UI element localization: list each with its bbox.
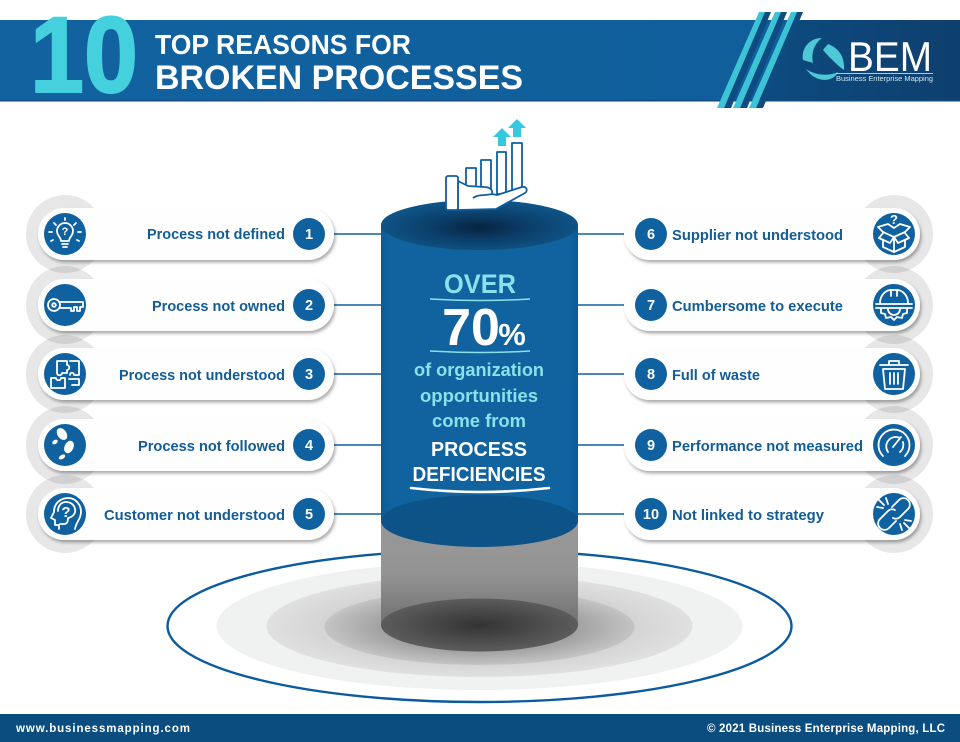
footer: www.businessmapping.com bbox=[15, 723, 190, 735]
cylinder text: of organization bbox=[414, 359, 544, 380]
central cylinder bbox=[381, 200, 578, 652]
base platform ellipses bbox=[168, 550, 792, 702]
reason 6: 6 bbox=[647, 227, 655, 243]
reason 1: Process not defined bbox=[147, 226, 285, 243]
reason 7 bbox=[624, 266, 933, 344]
cylinder text: % bbox=[498, 317, 526, 352]
icon: trash can bbox=[880, 361, 908, 389]
cylinder text: DEFICIENCIES bbox=[412, 464, 546, 486]
icon: head with question mark: ? bbox=[61, 504, 71, 521]
reason 2: 2 bbox=[305, 298, 313, 314]
icon: puzzle bbox=[51, 361, 79, 388]
title: BROKEN PROCESSES bbox=[155, 59, 523, 97]
reason 1: 1 bbox=[305, 227, 313, 243]
reason 4: Process not followed bbox=[138, 438, 285, 455]
cylinder text: 70 bbox=[442, 299, 500, 357]
cylinder text: OVER bbox=[444, 269, 516, 299]
footer bbox=[0, 714, 960, 742]
header banner bbox=[0, 0, 960, 115]
icon: broken link bbox=[877, 498, 911, 530]
cylinder text: opportunities bbox=[420, 385, 538, 406]
reason 3: 3 bbox=[305, 367, 313, 383]
reason 9 bbox=[624, 406, 933, 484]
reason 7: Cumbersome to execute bbox=[672, 298, 843, 315]
connector lines bbox=[325, 234, 636, 514]
icon: gauge bbox=[878, 430, 910, 456]
reason 5: 5 bbox=[305, 507, 313, 523]
icon: box with question mark: ? bbox=[890, 212, 898, 227]
reason 5 bbox=[26, 475, 334, 553]
icon: hand holding growth chart bbox=[446, 119, 527, 210]
reason 8 bbox=[624, 335, 933, 413]
icon: key bbox=[48, 299, 83, 311]
reason 4 bbox=[26, 406, 334, 484]
reason 5: Customer not understood bbox=[104, 507, 285, 524]
reason 9: 9 bbox=[647, 438, 655, 454]
decorative stripes bbox=[717, 12, 803, 108]
icon: box with question mark bbox=[878, 212, 910, 252]
reason 7: 7 bbox=[647, 298, 655, 314]
icon: light bulb bbox=[49, 218, 81, 247]
icon: helmet and gear bbox=[876, 290, 912, 320]
icon: footprints bbox=[51, 426, 76, 460]
cylinder text: PROCESS bbox=[431, 439, 527, 461]
reason 2: Process not owned bbox=[152, 298, 285, 315]
reason 4: 4 bbox=[305, 438, 313, 454]
reason 1 bbox=[26, 195, 334, 273]
BEM logo: Business Enterprise Mapping bbox=[836, 74, 933, 83]
reason 3 bbox=[26, 335, 334, 413]
footer: © 2021 Business Enterprise Mapping, LLC bbox=[707, 723, 945, 735]
icon: light bulb: ? bbox=[62, 226, 69, 238]
reason 3: Process not understood bbox=[119, 367, 285, 384]
reason 10: Not linked to strategy bbox=[672, 507, 825, 524]
reason 10 bbox=[624, 475, 933, 553]
reason 6: Supplier not understood bbox=[672, 227, 843, 244]
title bbox=[155, 29, 523, 97]
BEM logo: BEM bbox=[848, 33, 932, 80]
reason 10: 10 bbox=[643, 507, 659, 523]
BEM logo bbox=[803, 33, 933, 83]
title: TOP REASONS FOR bbox=[155, 29, 411, 60]
icon: head with question mark bbox=[51, 498, 81, 529]
cylinder text bbox=[411, 269, 549, 492]
reason 6 bbox=[624, 195, 933, 273]
reason 8: 8 bbox=[647, 367, 655, 383]
reason 8: Full of waste bbox=[672, 367, 760, 384]
cylinder text: come from bbox=[432, 410, 526, 431]
reason 2 bbox=[26, 266, 334, 344]
reason 9: Performance not measured bbox=[672, 438, 863, 455]
